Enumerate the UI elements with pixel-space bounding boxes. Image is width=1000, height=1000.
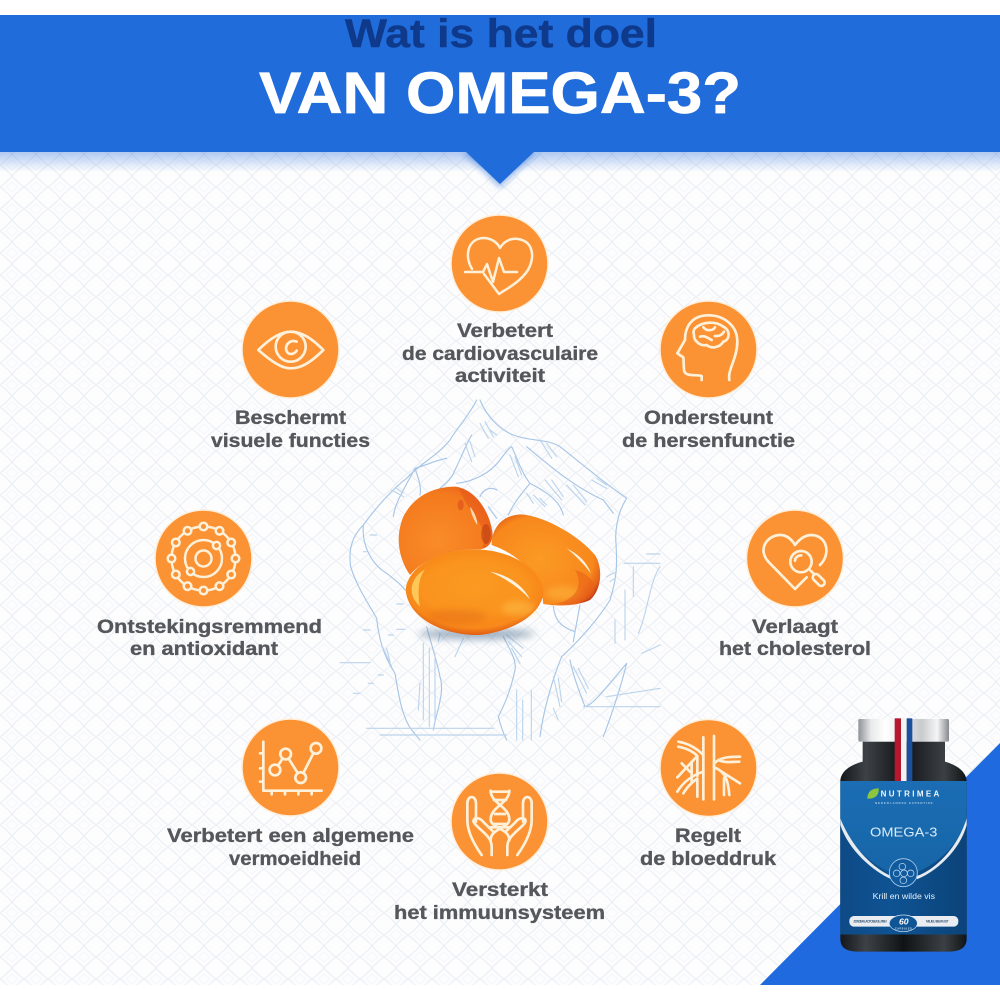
icon: line chart [242,719,339,816]
icon: heart with magnifier [746,510,844,607]
label: Regelt [675,826,742,847]
capsule: front [406,549,543,635]
label: Krill en wilde vis [873,892,935,901]
capsule: back left [399,487,493,575]
label [840,781,967,934]
label: 60 [899,917,909,927]
label [167,826,414,870]
bottle cap [858,719,949,742]
product: supplement bottle [840,718,967,952]
bottle body [840,742,967,952]
label: vermoeidheid [229,849,361,870]
item: cardiovascular [402,215,598,387]
label: Versterkt [452,880,549,901]
bottom white strip [0,985,1000,1000]
icon: molecule ring [155,510,252,607]
item: cholesterol [719,510,871,660]
header band [0,12,1000,188]
label [640,826,776,870]
illustration: iceberg line art [340,400,660,740]
icon: heart with pulse [451,215,548,312]
item: blood pressure [640,720,776,870]
item: anti-inflammatory [97,510,322,660]
corner: blue triangle [760,743,1000,985]
icon: head with brain [660,301,757,398]
item: brain [622,301,795,452]
label: het cholesterol [719,639,871,660]
label: Beschermt [235,408,347,429]
icon: hands holding DNA [451,773,548,870]
label: MILIEU BEWUST [926,920,949,924]
label: Ontstekingsremmend [97,617,322,638]
label: de cardiovasculaire [402,344,598,365]
label [394,880,605,924]
label: Verbetert [457,321,554,342]
label: Verbetert een algemene [167,826,414,847]
title line 1: Wat is het doel [345,12,657,56]
flag ribbon [895,718,912,781]
capsule: back right [492,514,600,605]
label [97,617,322,660]
label: Ondersteunt [644,408,774,429]
item: fatigue [167,719,414,870]
label: CAPSULES [895,927,912,930]
label: NEDERLANDSE EXPERTISE [875,801,933,805]
label: de hersenfunctie [622,431,795,452]
label [719,617,871,660]
label: en antioxidant [130,639,279,660]
illustration: omega-3 capsules [399,487,600,639]
label [211,408,370,452]
label: Verlaagt [752,617,839,638]
label: OMEGA-3 [870,826,937,840]
icon: branching vessels [660,720,757,816]
label [402,321,598,387]
label: activiteit [455,366,546,387]
label [622,408,795,452]
label: NUTRIMEA [881,790,940,799]
label: ZONDER LACTOSE / GLUTEN [853,920,887,924]
item: vision [211,301,370,452]
icon: eye [242,301,339,398]
title line 2: VAN OMEGA-3? [259,61,741,126]
label: de bloeddruk [640,849,776,870]
item: immune system [394,773,605,924]
label: visuele functies [211,431,370,452]
label: het immuunsysteem [394,903,605,924]
capsule shadow [418,629,535,639]
